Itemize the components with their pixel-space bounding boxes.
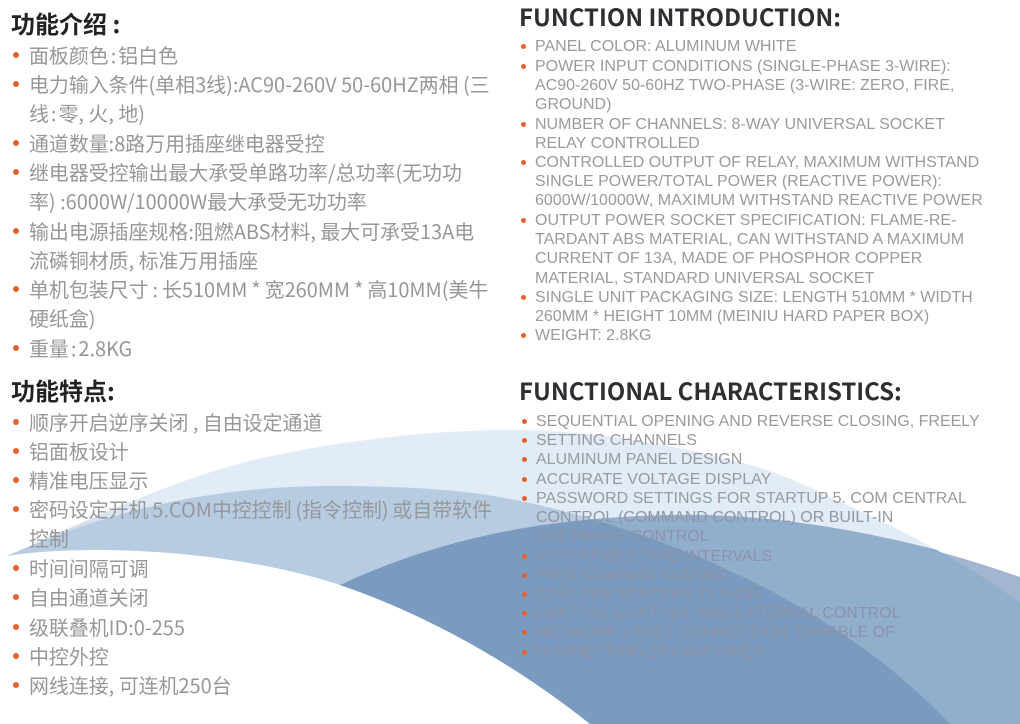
- wave: pale blue middle shape: [7, 486, 950, 724]
- wave: deep blue overlap: [340, 519, 950, 724]
- bullet: channels: NUMBER OF CHANNELS: 8-WAY UNIVERSAL SOCKET: [535, 116, 945, 133]
- bullet: cascade: CASCADE STACKER ID: 0-255: [536, 586, 762, 603]
- bullet: socket spec: TARDANT ABS MATERIAL, CAN WITHSTAND A MAXIMUM: [535, 231, 964, 248]
- background: layered blue waves: [7, 430, 1020, 724]
- bullet: password: CONTROL (COMMAND CONTROL) OR BUILT-IN: [536, 509, 893, 526]
- bullet: panel colour: 面板颜色:铝白色: [29, 40, 178, 69]
- heading: 功能介绍: 功能介绍 :: [11, 5, 120, 40]
- panel: English functional characteristics: [519, 372, 980, 661]
- bullet: power input: 线:零, 火, 地): [29, 98, 145, 127]
- bullet: packaging: 单机包装尺寸 : 长510MM * 宽260MM * 高10MM(美牛: [29, 274, 488, 303]
- bullet: socket spec: CURRENT OF 13A, MADE OF PHOSPHOR COPPER: [535, 250, 922, 267]
- bullet: aluminium panel: ALUMINUM PANEL DESIGN: [536, 451, 742, 468]
- bullet: password: 密码设定开机 5.COM中控控制 (指令控制) 或自带软件: [29, 494, 492, 523]
- bullet: power input: POWER INPUT CONDITIONS (SINGLE-PHASE 3-WIRE):: [535, 58, 951, 75]
- bullet: cascade: 级联叠机ID:0-255: [29, 612, 185, 641]
- bullet: relay output: [29, 157, 462, 215]
- bullet: channels: [535, 115, 945, 153]
- bullet: socket spec: MATERIAL, STANDARD UNIVERSAL SOCKET: [535, 270, 874, 287]
- bullet: power input: [29, 69, 490, 127]
- bullet: power input: GROUND): [535, 96, 611, 113]
- bullet: packaging: [29, 274, 488, 332]
- bullet: packaging: 硬纸盒): [29, 303, 96, 332]
- bullet: socket spec: OUTPUT POWER SOCKET SPECIFICATION: FLAME-RE-: [535, 212, 956, 229]
- bullet: relay output: CONTROLLED OUTPUT OF RELAY, MAXIMUM WITHSTAND: [535, 154, 979, 171]
- bullet: password: PASSWORD SETTINGS FOR STARTUP 5. COM CENTRAL: [536, 490, 967, 507]
- wave: right mid blue band: [340, 515, 1020, 724]
- bullet: password: 控制: [29, 523, 69, 552]
- bullet: relay output: 率) :6000W/10000W最大承受无功功率: [29, 186, 367, 215]
- bullet: socket spec: 流磷铜材质, 标准万用插座: [29, 245, 258, 274]
- bullet: password: [29, 494, 492, 552]
- bullet: password: SOFTWARE CONTROL: [536, 528, 709, 545]
- bullet: packaging: SINGLE UNIT PACKAGING SIZE: LENGTH 510MM * WIDTH: [535, 289, 973, 306]
- bullet: power input: 电力输入条件(单相3线):AC90-260V 50-60HZ两相 (三: [29, 69, 490, 98]
- bullet: channel closing: 自由通道关闭: [29, 582, 149, 611]
- bullet: voltage display: ACCURATE VOLTAGE DISPLAY: [536, 471, 771, 488]
- bullet: socket spec: 输出电源插座规格:阻燃ABS材料, 最大可承受13A电: [29, 216, 474, 245]
- bullet: panel colour: PANEL COLOR: ALUMINUM WHITE: [535, 38, 796, 55]
- bullet: power input: AC90-260V 50-60HZ TWO-PHASE (3-WIRE: ZERO, FIRE,: [535, 77, 954, 94]
- bullet: packaging: [535, 288, 973, 326]
- bullet: sequential: 顺序开启逆序关闭 , 自由设定通道: [29, 407, 322, 436]
- heading: functional characteristics: FUNCTIONAL CHARACTERISTICS:: [519, 372, 902, 407]
- bullet: power input: [535, 57, 954, 115]
- heading: 功能特点: 功能特点:: [11, 372, 115, 407]
- bullet: central control: CENTRAL CONTROL AND EXTERNAL CONTROL: [536, 605, 900, 622]
- bullet: network cable: NETWORK CABLE CONNECTION, CAPABLE OF: [536, 624, 895, 641]
- bullet: password: [536, 489, 967, 547]
- bullet: channels: RELAY CONTROLLED: [535, 135, 700, 152]
- bullet: time interval: 时间间隔可调: [29, 553, 149, 582]
- bullet: time interval: ADJUSTABLE TIME INTERVALS: [536, 548, 772, 565]
- bullet: relay output: 6000W/10000W, MAXIMUM WITHSTAND REACTIVE POWER: [535, 192, 983, 209]
- bullet: setting channels: SETTING CHANNELS: [536, 432, 697, 449]
- bullet: socket spec: [29, 216, 474, 274]
- bullet: network: 网线连接, 可连机250台: [29, 670, 232, 699]
- wave: right steel blue band: [340, 515, 1020, 724]
- panel: Chinese function introduction: [11, 5, 490, 362]
- panel: English function introduction: [519, 0, 983, 344]
- bullet: aluminium panel: 铝面板设计: [29, 436, 129, 465]
- bullet: relay output: SINGLE POWER/TOTAL POWER (REACTIVE POWER):: [535, 173, 942, 190]
- bullet: relay output: [535, 153, 983, 211]
- panel: Chinese function characteristics: [11, 372, 492, 699]
- bullet: central control: 中控外控: [29, 641, 109, 670]
- wave: lightest back shape: [7, 430, 1020, 724]
- bullet: weight: 重量:2.8KG: [29, 333, 132, 362]
- bullet: weight: WEIGHT: 2.8KG: [535, 327, 651, 344]
- bullet: sequential: SEQUENTIAL OPENING AND REVERSE CLOSING, FREELY: [536, 413, 980, 430]
- bullet: machines: CONNECTING 250 MACHINES: [536, 644, 764, 661]
- bullet: relay output: 继电器受控输出最大承受单路功率/总功率(无功功: [29, 157, 462, 186]
- bullet: channels: 通道数量:8路万用插座继电器受控: [29, 128, 324, 157]
- bullet: packaging: 260MM * HEIGHT 10MM (MEINIU HARD PAPER BOX): [535, 308, 929, 325]
- bullet: voltage display: 精准电压显示: [29, 465, 149, 494]
- bullet: channel closed: FREE CHANNEL CLOSED: [536, 567, 729, 584]
- bullet: socket spec: [535, 211, 964, 288]
